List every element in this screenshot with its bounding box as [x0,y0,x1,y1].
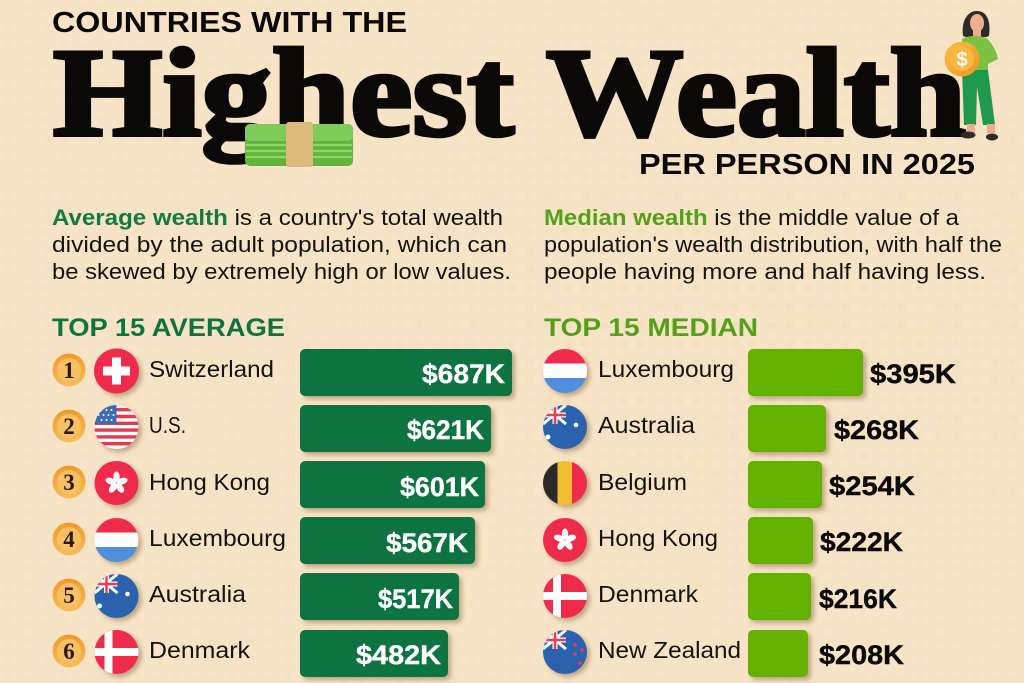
row: U.S.: U.S. [149,412,186,438]
row: Hong Kong: 3 [63,470,75,495]
row: Australia median: $268K [834,415,920,445]
icon: woman holding coin [944,11,998,140]
row: Denmark [52,630,448,677]
title: subtitle: PER PERSON IN 2025 [639,149,975,181]
row: Hong Kong median [543,517,904,564]
heading: top 15 median: TOP 15 MEDIAN [544,314,758,342]
text: median wealth definition: population's wealth distribution, with half the [544,232,1002,257]
row: Denmark: $482K [356,640,442,670]
row: Luxembourg: 4 [63,527,75,552]
row: Switzerland: Switzerland [149,356,274,382]
icon: stack of cash [245,122,353,167]
row: Luxembourg median: Luxembourg [598,356,734,382]
row: Hong Kong median: Hong Kong [598,525,718,551]
title: Wealth: Wealth [546,24,966,163]
row: Hong Kong [52,461,485,508]
row: Denmark median [543,573,897,620]
panel: top 15 average list [52,348,512,677]
row: Luxembourg median: $395K [870,359,957,389]
row: Hong Kong median: $222K [820,527,904,557]
row: Australia median: Australia [598,412,695,438]
text: average wealth definition: Average wealth is a country's total wealth [52,205,503,230]
text: average wealth definition: divided by the adult population, which can [52,232,507,257]
row: U.S.: $621K [407,415,484,445]
row: Denmark: Denmark [149,637,251,663]
row: Switzerland: $687K [422,359,506,389]
row: Switzerland [52,348,512,396]
row: Hong Kong: $601K [400,472,479,502]
text: average wealth definition [52,205,511,284]
row: Luxembourg [52,517,475,564]
row: Australia: $517K [378,584,453,614]
row: Luxembourg: Luxembourg [149,525,286,551]
row: Denmark median: $216K [819,584,897,614]
row: Australia: 5 [63,583,75,608]
row: U.S. [52,405,491,452]
row: Denmark median: Denmark [598,581,699,607]
row: New Zealand median [543,630,905,677]
row: Luxembourg: $567K [386,528,469,558]
row: Hong Kong: Hong Kong [149,469,270,495]
row: Switzerland: 1 [63,358,75,383]
title: Highest: Highest [53,24,514,163]
row: Luxembourg median [543,349,957,396]
row: Belgium median: Belgium [598,469,687,495]
row: Denmark: 6 [63,639,75,664]
row: New Zealand median: New Zealand [598,637,741,663]
row: Australia [52,573,459,620]
text: median wealth definition: Median wealth is the middle value of a [544,205,960,230]
row: New Zealand median: $208K [819,640,905,670]
row: Belgium median: $254K [829,471,916,501]
row: U.S.: 2 [63,414,75,439]
row: Australia: Australia [149,581,246,607]
icon: woman holding coin: $ [956,49,968,71]
text: median wealth definition: people having more and half having less. [544,259,986,284]
row: Belgium median [543,461,916,508]
title: kicker: COUNTRIES WITH THE [52,7,407,39]
row: Australia median [543,405,920,452]
text: average wealth definition: be skewed by extremely high or low values. [52,259,511,284]
text: median wealth definition [544,205,1002,284]
panel: top 15 median list [543,349,957,677]
heading: top 15 average: TOP 15 AVERAGE [52,314,285,342]
